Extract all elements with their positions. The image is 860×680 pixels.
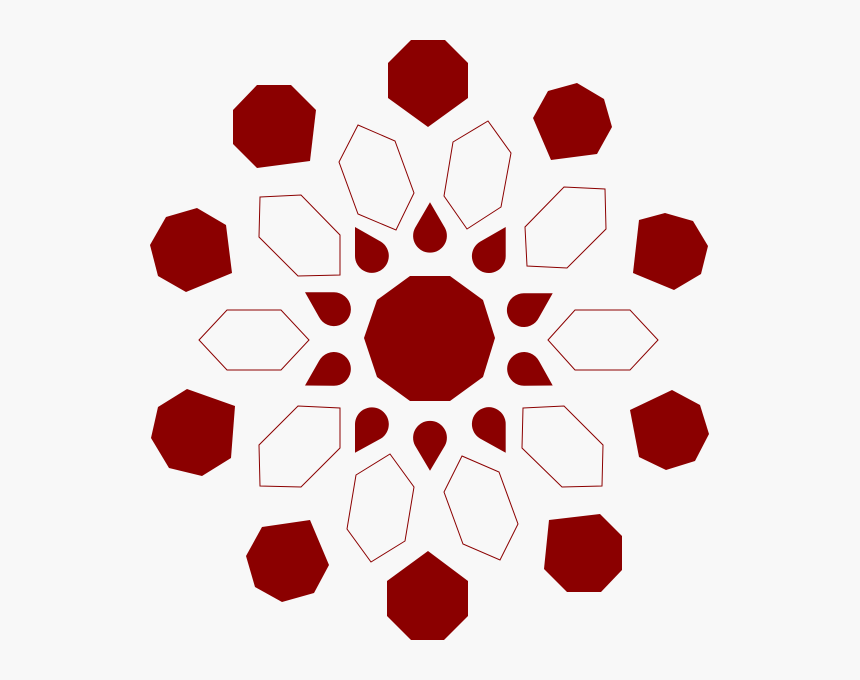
hexagon outline: upper right xyxy=(525,187,606,268)
hexagon outline: top right inner xyxy=(444,121,511,229)
hexagon outline: left xyxy=(199,310,309,370)
hexagon outline: right xyxy=(548,310,658,370)
teardrop: upper right xyxy=(472,227,506,273)
center decagon xyxy=(364,276,495,401)
polygon: right lower xyxy=(630,390,709,470)
hexagon outline: lower right xyxy=(522,406,603,487)
hexagon outline: bottom left inner xyxy=(347,454,414,562)
polygon: bottom right xyxy=(544,514,622,592)
middle ring of outlined hexagons xyxy=(199,121,658,562)
polygon: top right xyxy=(533,83,612,160)
inner ring of teardrops xyxy=(305,202,553,471)
polygon: left lower xyxy=(151,389,235,476)
teardrop: top xyxy=(413,202,447,253)
outer ring of solid polygons xyxy=(150,40,709,640)
polygon: top xyxy=(388,40,468,127)
teardrop: lower left xyxy=(355,407,389,453)
teardrop: bottom xyxy=(413,421,447,471)
hexagon outline: lower left xyxy=(259,406,340,487)
teardrop: right upper xyxy=(507,293,553,327)
hexagon outline: bottom right inner xyxy=(444,456,518,560)
hexagon outline: upper left xyxy=(259,195,340,276)
polygon: top left xyxy=(233,85,316,168)
hexagon outline: top left inner xyxy=(339,125,414,230)
teardrop: left upper xyxy=(305,292,351,326)
teardrop: left lower xyxy=(305,352,351,386)
polygon: bottom left xyxy=(246,520,329,602)
polygon: left upper xyxy=(150,208,232,292)
teardrop: lower right xyxy=(472,407,506,453)
teardrop: right lower xyxy=(507,352,553,386)
polygon: right upper xyxy=(633,213,708,290)
polygon: bottom xyxy=(387,551,468,640)
teardrop: upper left xyxy=(355,227,389,273)
